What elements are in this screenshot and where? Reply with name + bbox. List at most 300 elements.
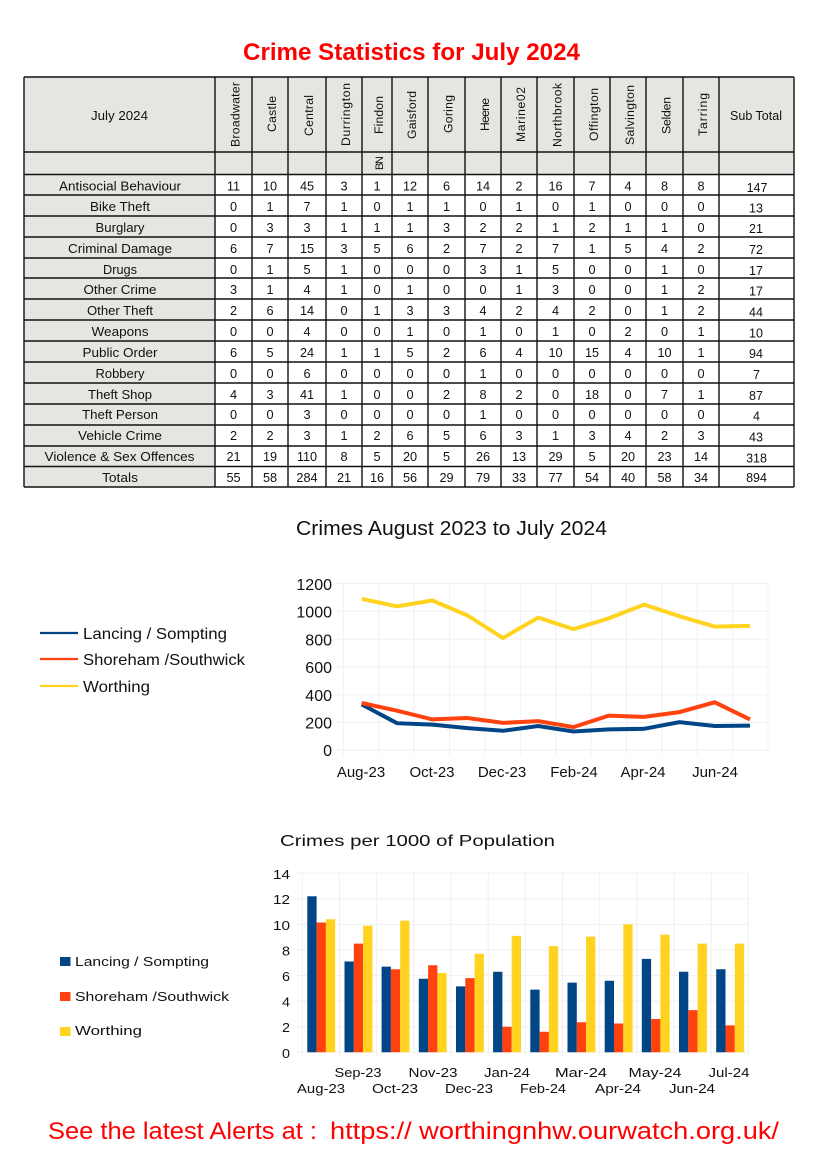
y axis labels: 12 (273, 893, 290, 907)
row: Totals (102, 470, 767, 485)
row: Vehicle Crime: 2 (661, 429, 668, 443)
row: Theft Shop: 8 (479, 388, 487, 402)
row: Violence & Sex Offences: 26 (476, 450, 490, 464)
row: Other Theft: 2 (230, 304, 237, 318)
row: Totals: 33 (512, 471, 526, 485)
row: Robbery: 0 (406, 367, 414, 381)
row: Other Crime: 1 (515, 283, 523, 297)
row: Other Crime: 4 (303, 283, 311, 297)
row: Theft Person: 0 (266, 408, 274, 422)
row: Violence & Sex Offences: 110 (297, 450, 317, 464)
row: Other Theft: 14 (300, 304, 314, 318)
table header: ward names: Goring (442, 95, 456, 133)
row: Criminal Damage: 7 (552, 242, 559, 256)
row: Drugs: 0 (230, 263, 237, 277)
row: Criminal Damage: 72 (749, 243, 763, 257)
x axis labels: Jan-24 (484, 1065, 530, 1080)
row: Vehicle Crime: 5 (443, 429, 450, 443)
row: Theft Shop: 2 (515, 388, 523, 402)
row: Bike Theft: 1 (443, 200, 450, 214)
row: Other Crime: 1 (661, 283, 668, 297)
row: Theft Shop (88, 387, 763, 403)
row: Drugs: 1 (515, 263, 523, 277)
row: Robbery: 0 (624, 367, 632, 381)
heading: bar chart: Crimes per 1000 of Population (280, 833, 555, 850)
row: Theft Shop: 18 (585, 388, 599, 402)
row: Other Theft (87, 303, 763, 320)
row: Criminal Damage: 7 (479, 242, 487, 256)
row: Antisocial Behaviour: 45 (300, 180, 314, 194)
row: Theft Person: 0 (515, 408, 523, 422)
y axis labels: 200 (305, 716, 332, 732)
x axis labels (337, 764, 738, 781)
x axis labels: Sep-23 (334, 1065, 382, 1080)
row: Robbery: 1 (479, 367, 487, 381)
row: Criminal Damage (68, 241, 763, 257)
row: Drugs: 1 (661, 263, 668, 277)
footer: alerts link (48, 1118, 779, 1145)
legend item: Lancing / Sompting: Lancing / Sompting (75, 954, 209, 969)
row: Robbery: 6 (303, 367, 311, 381)
x axis labels: Aug-23 (297, 1081, 345, 1096)
table header: ward names: Central (302, 95, 316, 136)
row: Robbery: 0 (661, 367, 668, 381)
row: Theft Shop: 7 (661, 388, 668, 402)
row: Totals: 79 (476, 471, 490, 485)
row: Other Crime: 3 (230, 283, 237, 297)
row: Violence & Sex Offences: 20 (403, 450, 417, 464)
row: Criminal Damage: 4 (661, 242, 668, 256)
row: Theft Person: 4 (753, 410, 760, 424)
row: Robbery: 7 (753, 368, 760, 382)
row: Theft Shop: 0 (624, 388, 632, 402)
heading: line chart: Crimes August 2023 to July 2024 (296, 518, 607, 540)
x axis labels: Feb-24 (550, 764, 598, 781)
row: Theft Shop: 0 (552, 388, 559, 402)
row: Other Crime: 17 (749, 284, 763, 298)
row: Other Theft: 1 (661, 304, 668, 318)
y axis labels: 400 (305, 688, 332, 705)
row: Other Crime: 0 (588, 283, 596, 297)
row: Totals: 29 (439, 471, 454, 485)
footer: alerts link: https:// worthingnhw.ourwatch.org.uk/ (330, 1118, 779, 1145)
row: Drugs: 17 (749, 264, 763, 278)
y axis labels: 0 (323, 743, 332, 760)
row: Theft Shop: 1 (697, 388, 705, 402)
table note: BN: BN (374, 156, 386, 170)
row: Burglary: 1 (552, 221, 559, 235)
row: Theft Person: Theft Person (82, 407, 158, 422)
x axis labels: Oct-23 (372, 1081, 418, 1096)
table header: ward names: Broadwater (228, 82, 242, 147)
y axis labels (296, 577, 332, 760)
row: Robbery: Robbery (96, 366, 145, 381)
row: Vehicle Crime: 6 (479, 429, 487, 443)
y axis labels: 800 (305, 632, 332, 650)
row: Totals: Totals (102, 470, 139, 485)
row: Vehicle Crime: 43 (749, 430, 763, 444)
row: Theft Person: 0 (588, 408, 596, 422)
row: Criminal Damage: 3 (340, 242, 348, 256)
row: Bike Theft (90, 199, 763, 216)
row: Other Crime: 0 (479, 283, 487, 297)
row: Other Theft: 6 (266, 304, 274, 318)
row: Theft Shop: 3 (266, 388, 274, 402)
row: Other Crime: 0 (624, 283, 632, 297)
row: Public Order: 5 (406, 346, 414, 360)
row: Other Crime: Other Crime (84, 282, 156, 297)
row: Weapons: 1 (697, 325, 705, 339)
row: Bike Theft: Bike Theft (90, 199, 150, 214)
series: Worthing (362, 599, 750, 638)
row: Robbery (96, 366, 760, 382)
bars: Worthing (326, 919, 744, 1052)
row: Antisocial Behaviour: 14 (476, 180, 490, 194)
row: Theft Person: 0 (373, 408, 381, 422)
y axis labels: 8 (282, 944, 290, 958)
row: Public Order: 2 (443, 346, 450, 360)
y axis labels: 1000 (296, 604, 332, 622)
row: Vehicle Crime (78, 428, 763, 444)
row: Criminal Damage: 2 (515, 242, 523, 256)
row: Burglary (96, 220, 763, 236)
row: Other Theft: 3 (443, 304, 450, 318)
row: Public Order: 5 (266, 346, 274, 360)
table header: ward names: Selden (660, 97, 674, 134)
row: Antisocial Behaviour: 10 (263, 180, 277, 194)
x axis labels: Aug-23 (337, 764, 385, 781)
table header: ward names: Findon (372, 96, 386, 134)
row: Other Crime: 0 (373, 283, 381, 297)
row: Antisocial Behaviour: 8 (661, 180, 668, 194)
x axis labels: Jun-24 (692, 764, 738, 781)
x axis labels (297, 1065, 750, 1096)
table header: ward names: Northbrook (550, 82, 564, 147)
row: Drugs: 0 (373, 263, 381, 277)
row: Other Crime: 1 (406, 283, 414, 297)
row: Burglary: 3 (303, 221, 311, 235)
row: Vehicle Crime: 2 (230, 429, 237, 443)
row: Criminal Damage: 2 (443, 242, 450, 256)
row: Theft Person: 0 (406, 408, 414, 422)
x axis labels: Oct-23 (409, 764, 455, 781)
row: Criminal Damage: Criminal Damage (68, 241, 172, 256)
row: Drugs: 0 (443, 263, 450, 277)
row: Burglary: 0 (697, 221, 705, 235)
row: Public Order: Public Order (82, 345, 158, 360)
row: Criminal Damage: 1 (588, 242, 596, 256)
row: Weapons: 0 (588, 325, 596, 339)
row: Weapons: 1 (406, 325, 414, 339)
row: Vehicle Crime: 1 (340, 429, 348, 443)
x axis labels: Mar-24 (555, 1065, 607, 1080)
row: Weapons: 1 (479, 325, 487, 339)
row: Antisocial Behaviour: Antisocial Behaviour (59, 178, 182, 194)
row: Burglary: Burglary (96, 220, 145, 235)
row: Other Theft: 2 (515, 304, 523, 318)
row: Other Crime: 0 (443, 283, 450, 297)
row: Burglary: 2 (515, 221, 523, 235)
row: Drugs (103, 262, 763, 278)
table header: ward names: Gaisford (405, 91, 419, 139)
row: Public Order (82, 345, 763, 361)
bar chart (273, 868, 750, 1096)
bars: Lancing / Sompting (307, 896, 726, 1052)
table shading (24, 77, 794, 487)
series: Shoreham /Southwick (362, 702, 750, 727)
row: Antisocial Behaviour: 7 (588, 180, 596, 194)
y axis labels: 1200 (296, 577, 332, 594)
row: Weapons: 1 (552, 325, 559, 339)
row: Vehicle Crime: Vehicle Crime (78, 428, 162, 443)
row: Bike Theft: 13 (749, 202, 763, 216)
row: Criminal Damage: 5 (624, 242, 632, 256)
row: Public Order: 94 (749, 347, 763, 361)
y axis labels: 4 (282, 996, 290, 1010)
row: Totals: 56 (403, 471, 417, 485)
row: Bike Theft: 0 (479, 200, 487, 214)
row: Other Crime (84, 282, 763, 298)
legend item: Lancing / Sompting: Lancing / Sompting (83, 626, 227, 643)
row: Public Order: 6 (479, 346, 487, 360)
row: Bike Theft: 0 (230, 200, 237, 214)
x axis labels: Dec-23 (478, 764, 526, 781)
row: Other Crime: 1 (340, 283, 348, 297)
table header: ward names: Heene (478, 98, 492, 131)
row: Violence & Sex Offences: Violence & Sex Offences (44, 449, 195, 464)
row: Criminal Damage: 2 (697, 242, 705, 256)
x axis labels: Apr-24 (595, 1081, 641, 1096)
row: Totals: 55 (226, 471, 241, 485)
row: Bike Theft: 0 (373, 200, 381, 214)
row: Violence & Sex Offences: 29 (548, 450, 563, 464)
row: Burglary: 1 (340, 221, 348, 235)
row: Theft Person (82, 407, 760, 424)
row: Drugs: 5 (552, 263, 559, 277)
row: Bike Theft: 7 (303, 200, 311, 214)
row: Vehicle Crime: 3 (697, 429, 705, 443)
row: Weapons: 0 (443, 325, 450, 339)
row: Vehicle Crime: 3 (515, 429, 523, 443)
legend item: Worthing (60, 1023, 142, 1038)
row: Criminal Damage: 6 (406, 242, 414, 256)
row: Public Order: 24 (300, 346, 314, 360)
table header: ward names: Offington (587, 88, 601, 141)
row: Robbery: 0 (373, 367, 381, 381)
row: Theft Person: 0 (661, 408, 668, 422)
row: Weapons: 2 (624, 325, 632, 339)
row: Antisocial Behaviour: 6 (443, 180, 450, 194)
row: Theft Person: 0 (552, 408, 559, 422)
x axis labels: Feb-24 (520, 1081, 566, 1096)
row: Drugs: 1 (266, 263, 274, 277)
x axis labels: Apr-24 (620, 764, 666, 781)
row: Other Theft: Other Theft (87, 303, 153, 318)
row: Violence & Sex Offences: 21 (226, 450, 241, 464)
row: Violence & Sex Offences: 5 (373, 450, 381, 464)
row: Antisocial Behaviour: 4 (624, 180, 632, 194)
table header: ward names: Castle (265, 96, 279, 132)
row: Drugs: 5 (303, 263, 311, 277)
row: Antisocial Behaviour: 3 (340, 180, 348, 194)
row: Weapons: 4 (303, 325, 311, 339)
row: Burglary: 1 (624, 221, 632, 235)
row: Other Theft: 44 (749, 306, 763, 320)
row: Theft Person: 3 (303, 408, 311, 422)
row: Public Order: 1 (373, 346, 381, 360)
row: Drugs: 0 (588, 263, 596, 277)
row: Violence & Sex Offences (44, 449, 767, 466)
row: Violence & Sex Offences: 8 (340, 450, 348, 464)
legend: line chart (40, 626, 246, 696)
y axis labels: 10 (273, 919, 290, 933)
row: Other Theft: 3 (406, 304, 414, 318)
row: Bike Theft: 0 (697, 200, 705, 214)
row: Public Order: 10 (657, 346, 672, 360)
row: Vehicle Crime: 2 (266, 429, 274, 443)
row: Burglary: 21 (749, 222, 763, 236)
row: Violence & Sex Offences: 23 (657, 450, 672, 464)
row: Burglary: 1 (661, 221, 668, 235)
row: Public Order: 4 (515, 346, 523, 360)
y axis labels: 6 (282, 970, 290, 984)
row: Theft Person: 0 (230, 408, 237, 422)
row: Drugs: 1 (340, 263, 348, 277)
legend item: Shoreham /Southwick: Shoreham /Southwick (75, 989, 230, 1004)
row: Other Crime: 3 (552, 283, 559, 297)
row: Vehicle Crime: 2 (373, 429, 381, 443)
row: Violence & Sex Offences: 5 (588, 450, 596, 464)
row: Weapons: 0 (373, 325, 381, 339)
row: Theft Shop: 0 (373, 388, 381, 402)
row: Weapons: 0 (340, 325, 348, 339)
table header: ward names: Marine02 (514, 87, 528, 142)
row: Weapons: 0 (266, 325, 274, 339)
row: Burglary: 2 (479, 221, 487, 235)
row: Totals: 58 (263, 471, 277, 485)
x axis labels: Dec-23 (445, 1081, 493, 1096)
table header: sub total: Sub Total (730, 109, 782, 123)
row: Public Order: 1 (697, 346, 705, 360)
row: Robbery: 0 (515, 367, 523, 381)
row: Weapons: 10 (749, 326, 763, 340)
row: Weapons: 0 (230, 325, 237, 339)
row: Public Order: 1 (340, 346, 348, 360)
row: Totals: 34 (694, 471, 708, 485)
row: Other Theft: 0 (624, 304, 632, 318)
row: Weapons: Weapons (92, 324, 149, 339)
row: Vehicle Crime: 3 (588, 429, 596, 443)
row: Weapons: 0 (661, 325, 668, 339)
row: Antisocial Behaviour: 8 (697, 180, 705, 194)
row: Theft Shop: 1 (340, 388, 348, 402)
footer: alerts link: See the latest Alerts at : (48, 1118, 317, 1145)
y axis labels: 600 (305, 660, 332, 677)
row: Burglary: 1 (406, 221, 414, 235)
panel: crime statistics table (24, 77, 794, 487)
row: Burglary: 2 (588, 221, 596, 235)
row: Bike Theft: 1 (340, 200, 348, 214)
x axis labels: May-24 (628, 1065, 682, 1080)
y axis labels: 0 (282, 1047, 290, 1061)
row: Other Crime: 2 (697, 283, 705, 297)
row: Bike Theft: 1 (266, 200, 274, 214)
row: Robbery: 0 (588, 367, 596, 381)
y axis labels (273, 868, 290, 1061)
row: Bike Theft: 0 (661, 200, 668, 214)
row: Vehicle Crime: 4 (624, 429, 632, 443)
legend: bar chart (60, 954, 230, 1038)
table header: ward names: Durrington (339, 83, 353, 146)
row: Robbery: 0 (552, 367, 559, 381)
row: Bike Theft: 1 (406, 200, 414, 214)
row: Theft Person: 0 (340, 408, 348, 422)
row: Criminal Damage: 5 (373, 242, 381, 256)
row: Public Order: 4 (624, 346, 632, 360)
legend item: Worthing: Worthing (75, 1023, 142, 1038)
row: Violence & Sex Offences: 19 (263, 450, 277, 464)
row: Drugs: 3 (479, 263, 487, 277)
row: Drugs: 0 (406, 263, 414, 277)
row: Burglary: 3 (266, 221, 274, 235)
row: Bike Theft: 0 (552, 200, 559, 214)
row: Other Theft: 2 (697, 304, 705, 318)
row: Weapons: 0 (515, 325, 523, 339)
row: Robbery: 0 (340, 367, 348, 381)
row: Burglary: 3 (443, 221, 450, 235)
row: Antisocial Behaviour: 12 (403, 180, 417, 194)
row: Totals: 16 (370, 471, 384, 485)
row: Criminal Damage: 15 (300, 242, 314, 256)
row: Totals: 54 (585, 471, 599, 485)
table header: ward names: Tarring (696, 93, 710, 136)
row: Vehicle Crime: 6 (406, 429, 414, 443)
row: Violence & Sex Offences: 318 (746, 452, 767, 466)
row: Other Theft: 4 (479, 304, 487, 318)
row: Other Theft: 4 (552, 304, 559, 318)
row: Theft Shop: 4 (230, 388, 237, 402)
row: Totals: 894 (746, 471, 767, 485)
legend item: Worthing (40, 679, 150, 696)
row: Theft Person: 0 (697, 408, 705, 422)
row: Public Order: 6 (230, 346, 237, 360)
row: Theft Shop: Theft Shop (88, 387, 152, 402)
row: Violence & Sex Offences: 13 (512, 450, 526, 464)
x axis labels: Jul-24 (708, 1065, 750, 1080)
line chart (296, 577, 768, 781)
row: Totals: 284 (296, 471, 318, 485)
row: Antisocial Behaviour: 11 (227, 180, 240, 194)
row: Drugs: 0 (697, 263, 705, 277)
row: Robbery: 0 (443, 367, 450, 381)
row: Drugs: 0 (624, 263, 632, 277)
row: Totals: 77 (548, 471, 563, 485)
row: Drugs: Drugs (103, 262, 137, 277)
legend item: Shoreham /Southwick: Shoreham /Southwick (83, 652, 246, 669)
x axis labels: Nov-23 (408, 1065, 458, 1080)
row: Other Theft: 0 (340, 304, 348, 318)
row: Theft Person: 1 (479, 408, 487, 422)
row: Theft Person: 0 (624, 408, 632, 422)
table header: ward names: Salvington (623, 85, 637, 145)
row: Bike Theft: 1 (515, 200, 523, 214)
row: Violence & Sex Offences: 5 (443, 450, 450, 464)
row: Criminal Damage: 7 (266, 242, 274, 256)
row: Other Theft: 2 (588, 304, 596, 318)
row: Theft Shop: 41 (300, 388, 314, 402)
row: Theft Shop: 2 (443, 388, 450, 402)
row: Robbery: 0 (697, 367, 705, 381)
